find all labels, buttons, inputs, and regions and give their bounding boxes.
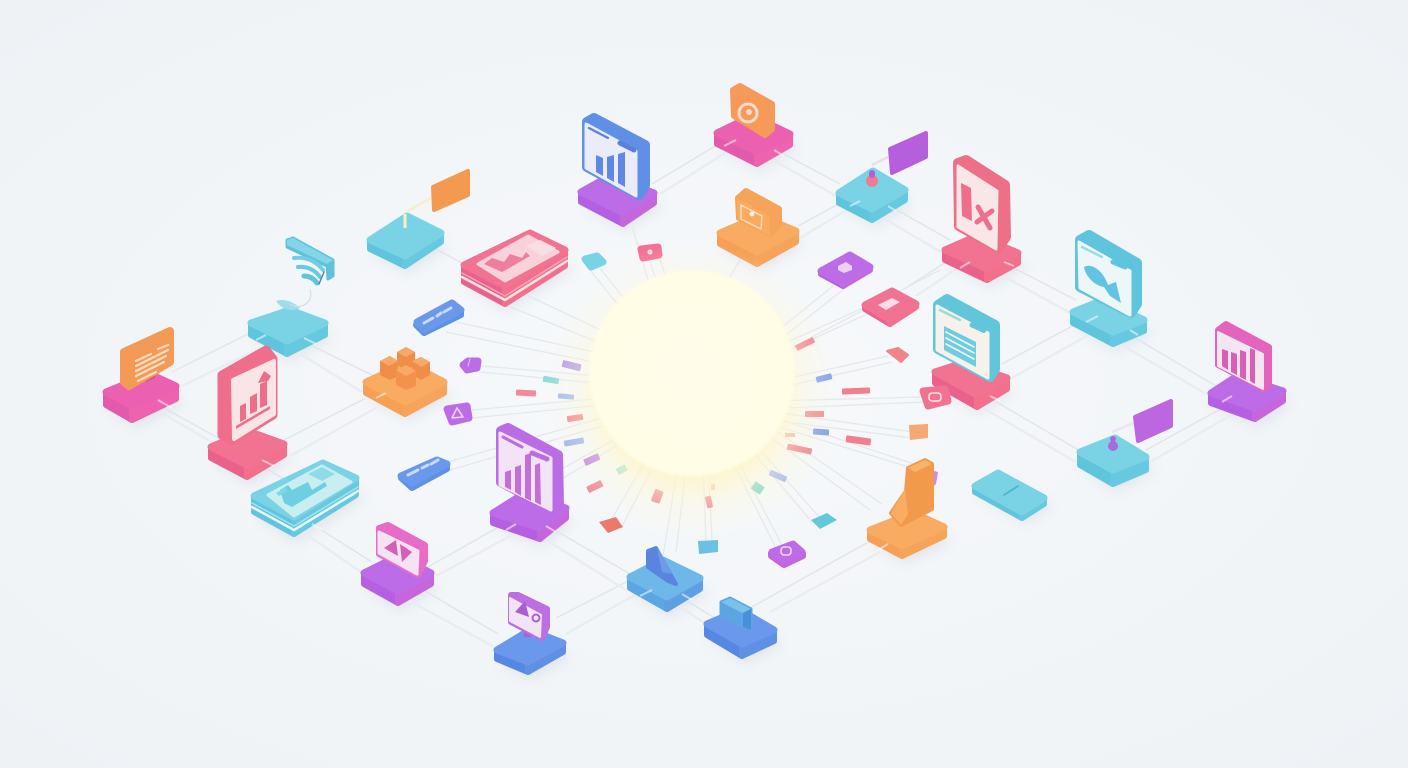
node: purple base with large bar chart screen [493, 428, 566, 539]
node: purple base with blue bar chart screen [581, 118, 654, 224]
token: light blue chip [698, 540, 718, 554]
node: purple base with magenta bar screen [1211, 324, 1283, 419]
node: blue base with purple screen [497, 595, 563, 672]
icon: purple screen [510, 595, 547, 638]
node: pink base with orange text panel [106, 331, 176, 420]
node: teal base with orange panel [370, 171, 468, 266]
token: coral chip lower left [599, 517, 623, 533]
node: teal base with butterfly screen [1073, 235, 1144, 344]
icon: purple bar chart screen [500, 428, 559, 510]
icon: orange icon box [733, 86, 772, 135]
token: teal chip [585, 256, 603, 267]
icon: rising chart sign [222, 350, 274, 440]
node: pink stacked card [462, 233, 567, 304]
token: purple triangle card [447, 406, 469, 422]
token: coral chip [887, 348, 908, 362]
icon: teal window screen [937, 299, 995, 378]
node: red base with X screen [945, 160, 1018, 280]
icon: light blue block [721, 598, 751, 630]
icon: red X screen [958, 160, 1006, 249]
core: glowing sphere [589, 270, 795, 476]
radial lines to the core [446, 226, 940, 562]
soft ground shadows [106, 128, 1292, 680]
icon: blue bar chart screen [586, 118, 645, 196]
node: teal double tile [975, 473, 1044, 518]
icon: magenta bar screen [1218, 324, 1269, 389]
icon: orange L block [891, 460, 932, 525]
icon: card content [478, 236, 558, 281]
node: teal stacked card [252, 463, 358, 534]
icon: pink screen [379, 525, 425, 575]
small purple tile behind orange base [930, 470, 938, 490]
network connection lines [150, 142, 1240, 648]
icon: teal shape screen [1079, 235, 1137, 315]
glow around the core [543, 242, 843, 542]
icon: purple pin [1108, 436, 1118, 451]
node: red base with rising bar chart sign [211, 350, 284, 477]
node: blue base with ramp shape [630, 547, 700, 609]
node: pink base with teal window screen [935, 299, 1007, 407]
token: purple rounded card [771, 544, 803, 565]
token: purple diamond card [821, 255, 870, 286]
node: pink base with orange icon box [717, 86, 790, 164]
icon: card content [268, 466, 351, 516]
connector highlights [158, 140, 1232, 600]
node: blue base with light blue block [707, 598, 774, 656]
icon: orange panel [433, 171, 468, 210]
node: teal base with purple panel (lower right) [1080, 401, 1171, 484]
token: red chip [641, 247, 659, 258]
icon: orange box [738, 191, 779, 235]
icon: pin [866, 170, 878, 187]
token: teal chip lower right [811, 513, 837, 529]
token: red rounded card [923, 389, 948, 406]
token: red card [865, 291, 916, 324]
token: blue card upper [416, 303, 461, 333]
icon: orange cubes [380, 347, 430, 390]
node: orange base with orange box [720, 191, 796, 264]
node: teal base with purple panel (top right) [839, 133, 926, 220]
tiny data chips [516, 337, 871, 508]
icon: purple panel [1135, 401, 1171, 441]
node: orange base with L shape [870, 460, 944, 556]
icon: orange text panel [124, 331, 170, 386]
node: teal base with wifi panel [251, 238, 333, 354]
token: purple chip [463, 359, 478, 370]
token: blue card lower [401, 460, 447, 488]
icon: blue ramp [648, 547, 676, 584]
icon: wifi panel [287, 238, 333, 284]
node: orange base with cube cluster [366, 347, 444, 414]
node: purple base with pink screen [364, 525, 431, 603]
icon: purple panel [890, 133, 926, 173]
token: orange chip [909, 424, 928, 440]
